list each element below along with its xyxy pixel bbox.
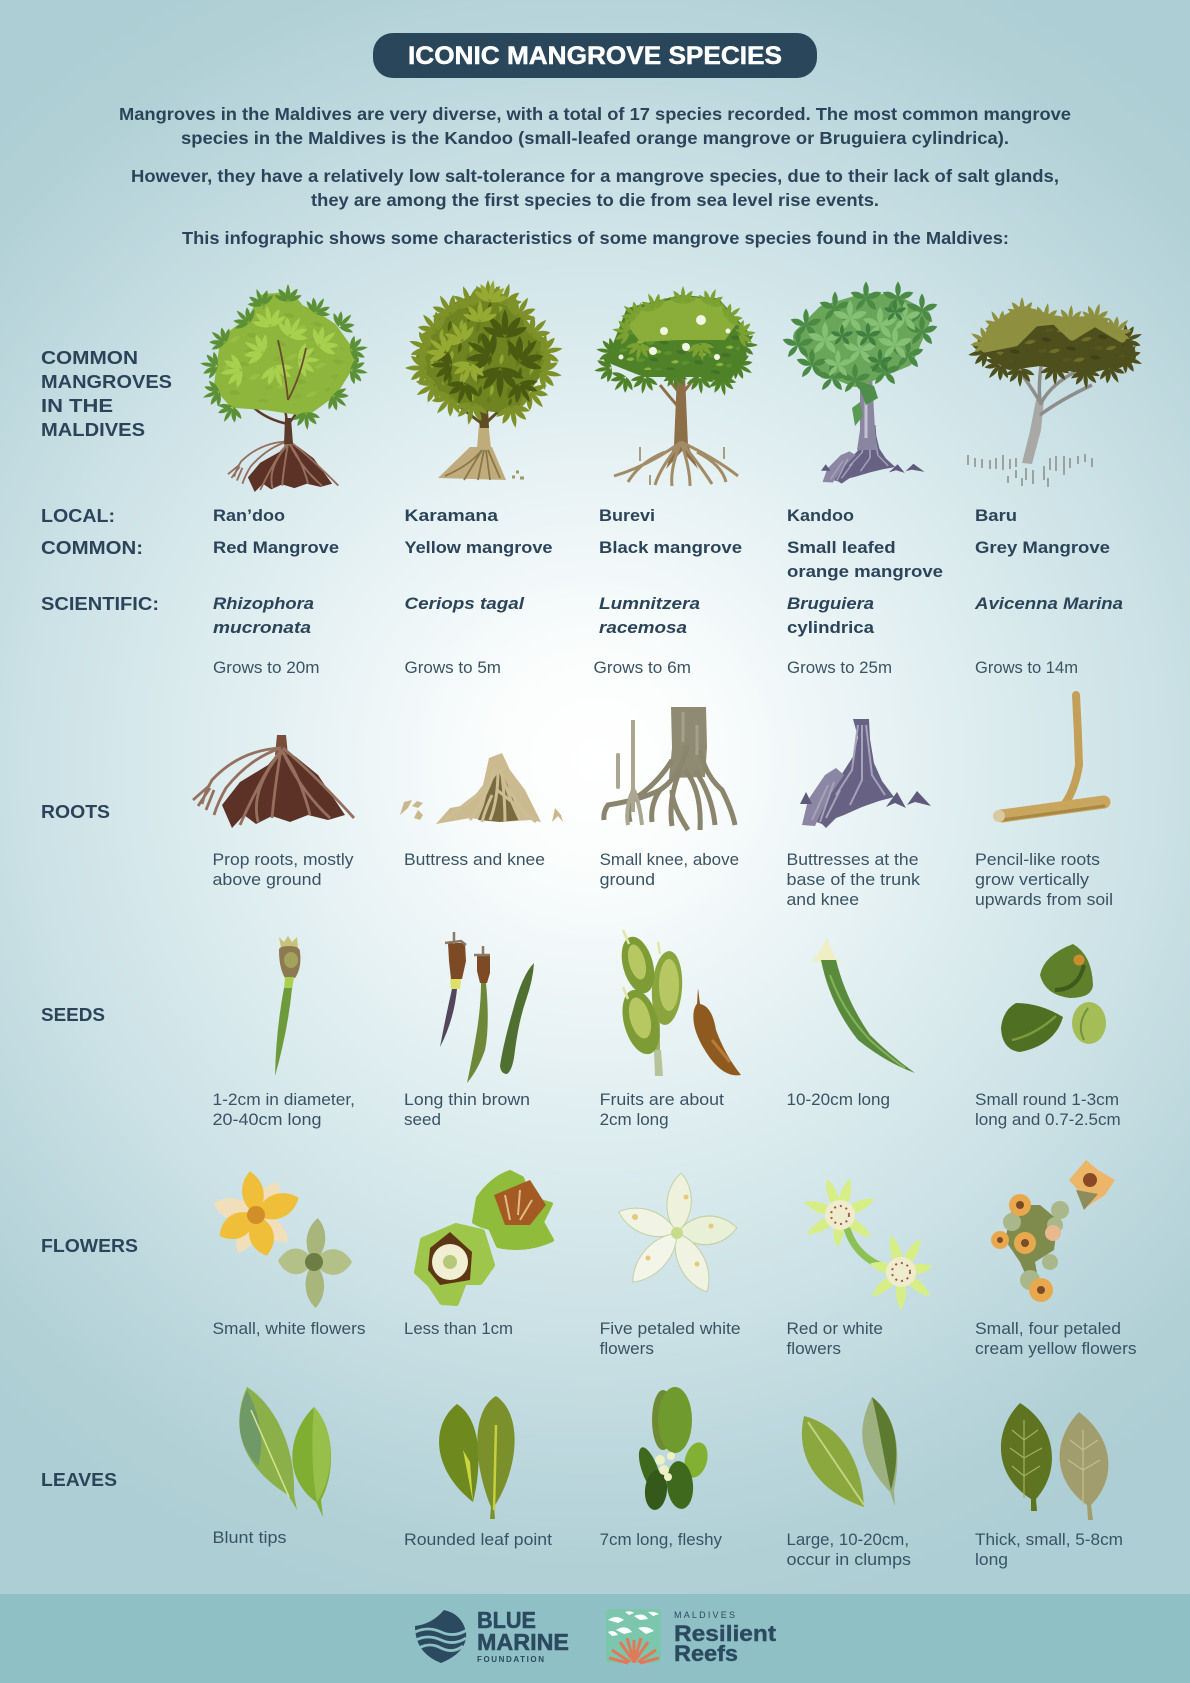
captions: roots: Pencil-like roots [975, 851, 1100, 869]
leaves: grey mangrove [1001, 1403, 1108, 1520]
species names: red mangrove: Grows to 20m [213, 659, 320, 677]
leaves: red mangrove [239, 1387, 331, 1517]
row labels: local, common, scientific: COMMON: [41, 538, 143, 558]
species names: small leafed orange mangrove: cylindrica [787, 618, 875, 637]
roots: small knee [604, 707, 735, 830]
roots: buttress and knee [400, 753, 563, 824]
captions: roots: and knee [786, 891, 859, 909]
captions: roots: Buttresses at the [786, 851, 918, 869]
logo: blue marine foundation: BLUE [477, 1607, 536, 1633]
species names: red mangrove [213, 506, 339, 677]
captions: leaves: Rounded leaf point [404, 1531, 552, 1549]
heading: common mangroves: MALDIVES [41, 420, 145, 440]
captions: flowers: Small, white flowers [212, 1320, 366, 1338]
species names: black mangrove: racemosa [599, 618, 687, 637]
species names: grey mangrove: Grows to 14m [975, 659, 1078, 677]
roots: buttresses at the base [800, 719, 931, 828]
heading: flowers: FLOWERS [41, 1236, 138, 1256]
species names: grey mangrove: Grey Mangrove [975, 538, 1110, 557]
tree: black mangrove [592, 284, 759, 486]
heading: leaves: LEAVES [41, 1470, 117, 1490]
captions: leaves: Large, 10-20cm, [786, 1531, 909, 1549]
heading: common mangroves: MANGROVES [41, 372, 172, 392]
logo: blue marine foundation: MARINE [477, 1629, 569, 1655]
species names: red mangrove: Rhizophora [213, 594, 314, 613]
captions: seeds: Long thin brown [404, 1091, 530, 1109]
seed: yellow mangrove [440, 932, 534, 1083]
leaves: yellow mangrove [439, 1396, 515, 1519]
title banner: ICONIC MANGROVE SPECIES [408, 42, 782, 70]
title banner [373, 33, 817, 78]
species names: black mangrove [594, 506, 742, 677]
captions: roots: grow vertically [975, 871, 1090, 889]
heading: seeds: SEEDS [41, 1005, 105, 1025]
intro text: they are among the first species to die from sea level rise events. [311, 190, 879, 210]
species names: small leafed orange mangrove: orange mangrove [787, 562, 943, 581]
seed: black mangrove [616, 930, 741, 1076]
tree: yellow mangrove [403, 277, 566, 480]
species names: red mangrove: Red Mangrove [213, 538, 339, 557]
species names: small leafed orange mangrove: Small leafed [787, 538, 896, 557]
footer band [0, 1594, 1190, 1683]
heading: common mangroves [41, 348, 172, 440]
captions: seeds: 2cm long [600, 1111, 669, 1129]
intro text: This infographic shows some characteristics of some mangrove species found in the Maldives: [182, 228, 1009, 248]
captions: flowers: Five petaled white [600, 1320, 741, 1338]
captions: roots: upwards from soil [975, 891, 1113, 909]
species names: yellow mangrove [404, 506, 552, 677]
species names: black mangrove: Black mangrove [599, 538, 742, 557]
captions: roots: base of the trunk [786, 871, 921, 889]
tree: small leafed orange mangrove [783, 282, 937, 484]
species names: red mangrove: mucronata [213, 618, 311, 637]
species names: black mangrove: Lumnitzera [599, 594, 700, 613]
row labels: local, common, scientific [41, 506, 159, 614]
intro text [119, 104, 1071, 248]
logo: maldives resilient reefs: Reefs [674, 1641, 738, 1666]
captions: roots: Prop roots, mostly [212, 851, 354, 869]
captions: seeds: 20-40cm long [212, 1111, 322, 1129]
logo: maldives resilient reefs: Resilient [674, 1621, 777, 1646]
row labels: local, common, scientific: SCIENTIFIC: [41, 594, 159, 614]
captions: flowers: Small, four petaled [975, 1320, 1121, 1338]
species names: yellow mangrove: Grows to 5m [404, 659, 501, 677]
species names: small leafed orange mangrove: Bruguiera [787, 594, 874, 613]
captions: flowers: flowers [786, 1340, 841, 1358]
captions: seeds: Small round 1-3cm [975, 1091, 1119, 1109]
leaves: kandoo [802, 1397, 897, 1507]
species names: small leafed orange mangrove: Kandoo [787, 506, 854, 525]
roots: prop roots [193, 735, 354, 828]
captions: flowers: cream yellow flowers [975, 1340, 1137, 1358]
captions: flowers [212, 1320, 1137, 1358]
captions: roots: Small knee, above [600, 851, 739, 869]
captions: flowers: flowers [600, 1340, 654, 1358]
species names: yellow mangrove: Yellow mangrove [404, 538, 552, 557]
roots: pencil-like roots [993, 695, 1104, 822]
species names: yellow mangrove: Karamana [404, 506, 499, 525]
captions: leaves [212, 1529, 1123, 1569]
intro text: species in the Maldives is the Kandoo (small-leafed orange mangrove or Bruguiera cylindrica). [181, 128, 1009, 148]
captions: seeds: 1-2cm in diameter, [212, 1091, 355, 1109]
logo: maldives resilient reefs [606, 1609, 777, 1666]
captions: leaves: Blunt tips [212, 1529, 286, 1547]
flower: yellow mangrove [417, 1172, 552, 1303]
species names: small leafed orange mangrove: Grows to 25m [787, 659, 892, 677]
captions: roots [212, 851, 1113, 909]
tree: grey mangrove [964, 297, 1147, 487]
species names: grey mangrove: Avicenna Marina [974, 594, 1123, 613]
flower: red mangrove [211, 1170, 352, 1308]
intro text: Mangroves in the Maldives are very diverse, with a total of 17 species recorded. The most common mangrove [119, 104, 1071, 124]
seed: red mangrove [275, 936, 300, 1076]
flower: baru [991, 1160, 1115, 1302]
heading: common mangroves: IN THE [41, 396, 113, 416]
seed: kandoo pod [811, 938, 915, 1073]
species names: grey mangrove [974, 506, 1123, 677]
captions: leaves: occur in clumps [786, 1551, 911, 1569]
tree: red mangrove [198, 284, 370, 492]
species names: grey mangrove: Baru [975, 506, 1017, 525]
captions: seeds: Fruits are about [600, 1091, 724, 1109]
heading: roots: ROOTS [41, 802, 110, 822]
logo: blue marine foundation [415, 1607, 569, 1664]
intro text: However, they have a relatively low salt-tolerance for a mangrove species, due to their lack of salt glands, [131, 166, 1059, 186]
logo: blue marine foundation: FOUNDATION [477, 1655, 544, 1664]
captions: seeds: 10-20cm long [786, 1091, 890, 1109]
captions: roots: Buttress and knee [404, 851, 545, 869]
row labels: local, common, scientific: LOCAL: [41, 506, 115, 526]
seed: small round nuts [1001, 944, 1106, 1052]
captions: leaves: long [975, 1551, 1008, 1569]
logo: maldives resilient reefs: MALDIVES [674, 1610, 735, 1620]
captions: flowers: Less than 1cm [404, 1320, 513, 1338]
leaves: black mangrove [634, 1387, 711, 1511]
captions: flowers: Red or white [786, 1320, 883, 1338]
species names: black mangrove: Burevi [599, 506, 655, 525]
species names: red mangrove: Ran’doo [213, 506, 285, 525]
captions: seeds [212, 1091, 1121, 1129]
captions: seeds: seed [404, 1111, 441, 1129]
flower: black mangrove [615, 1172, 738, 1298]
captions: seeds: long and 0.7-2.5cm [975, 1111, 1121, 1129]
captions: leaves: Thick, small, 5-8cm [975, 1531, 1123, 1549]
captions: leaves: 7cm long, fleshy [600, 1531, 723, 1549]
captions: roots: ground [600, 871, 655, 889]
flower: kandoo [803, 1177, 933, 1310]
captions: roots: above ground [212, 871, 322, 889]
species names: yellow mangrove: Ceriops tagal [404, 594, 525, 613]
species names: black mangrove: Grows to 6m [594, 659, 691, 677]
species names: small leafed orange mangrove [787, 506, 943, 677]
heading: common mangroves: COMMON [41, 348, 138, 368]
